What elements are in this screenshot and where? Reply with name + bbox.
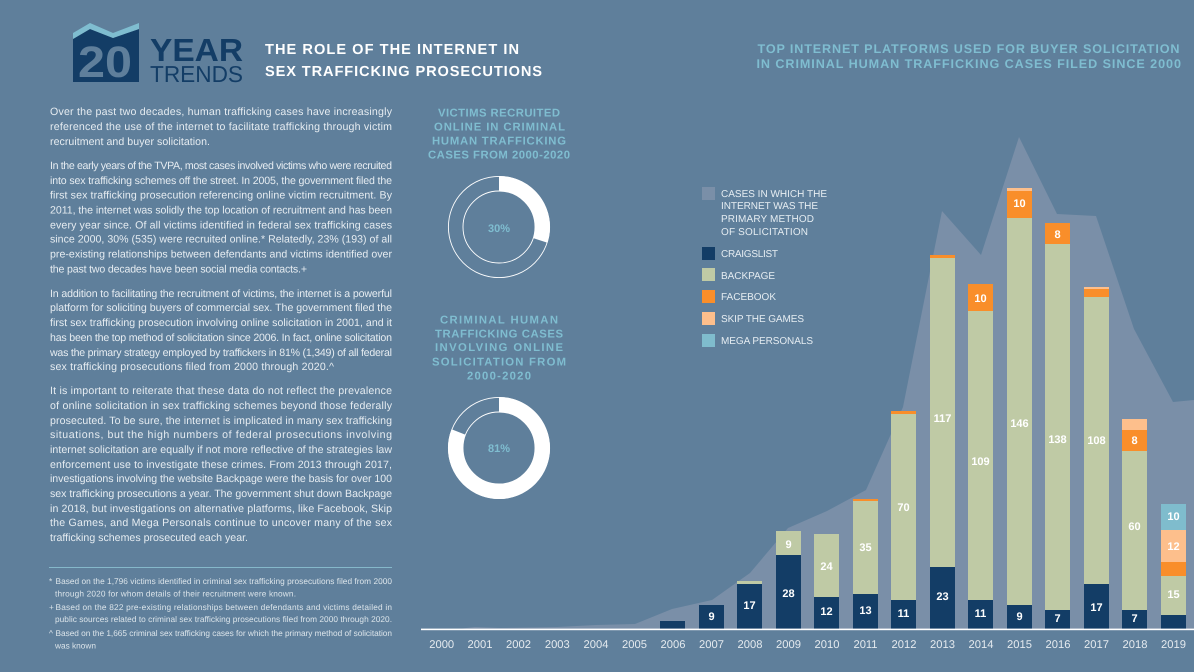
bar: 2009: 28 — [782, 588, 795, 600]
bar: 2009 — [776, 531, 801, 629]
chart axis: years: 2018 — [1123, 639, 1147, 651]
legend: PRIMARY METHOD — [721, 214, 814, 225]
heading: victims recruited online: CASES FROM 2000-2020 — [428, 150, 570, 162]
chart axis: years: 2016 — [1046, 639, 1070, 651]
heading: online solicitation: TRAFFICKING CASES — [435, 328, 563, 340]
bar: 2018: 60 — [1128, 521, 1141, 533]
bar: 2010: 12 — [820, 606, 833, 618]
chart: donut 30%: 30% — [488, 223, 510, 235]
text block: body copy: since 2000, 30% (535) were recruited online.* Relatedly, 23% (193) of all — [50, 234, 392, 246]
heading: chart title: TOP INTERNET PLATFORMS USED FOR BUYER SOLICITATION — [758, 42, 1180, 56]
bar: 2009: 9 — [785, 539, 792, 551]
bar chart: platforms by year — [660, 188, 1186, 629]
title: THE ROLE OF THE INTERNET IN — [265, 42, 519, 58]
title — [265, 42, 542, 80]
text block: footnotes: * — [49, 576, 53, 586]
text block: body copy: has been the top method of solicitation since 2006. In fact, online solicitation — [50, 332, 392, 344]
text block: body copy — [49, 106, 393, 544]
bar: 2015: 10 — [1013, 198, 1026, 210]
icon: 20 year trends logo: TRENDS — [150, 61, 243, 87]
text block: body copy: of online solicitation in sex trafficking schemes beyond those federally — [50, 400, 393, 412]
legend: OF SOLICITATION — [721, 227, 808, 238]
bar: 2019: 15 — [1167, 589, 1180, 601]
area chart: cases with internet as primary method — [441, 137, 1194, 629]
chart axis: years: 2001 — [468, 639, 492, 651]
bar: 2017: 108 — [1087, 435, 1106, 447]
chart axis: years — [429, 639, 1186, 651]
text block: body copy: the past two decades have been social media contacts.+ — [50, 263, 307, 275]
text block: body copy: recruitment and buyer solicitation. — [50, 136, 210, 148]
chart axis: years: 2004 — [584, 639, 608, 651]
bar: 2014: 109 — [971, 456, 990, 468]
title: SEX TRAFFICKING PROSECUTIONS — [265, 64, 542, 80]
text block: footnotes: Based on the 822 pre-existing relationships between defendants and victims detailed in — [56, 602, 392, 612]
bar: 2018: 7 — [1131, 613, 1138, 625]
legend: INTERNET WAS THE — [721, 201, 818, 212]
bar: 2017 — [1084, 287, 1109, 629]
bar: 2015: 146 — [1010, 418, 1029, 430]
text block: body copy: prosecuted. To be sure, the internet is implicated in many sex trafficking — [50, 415, 392, 427]
bar: 2007: 9 — [708, 611, 715, 623]
chart axis: years: 2010 — [815, 639, 839, 651]
bar: 2011 — [853, 499, 878, 629]
bar: 2016: 8 — [1054, 229, 1061, 241]
bar: 2010: 24 — [820, 561, 833, 573]
text block: footnotes: through 2020 for whom details of their recruitment were known. — [55, 588, 296, 598]
text block: body copy: In addition to facilitating the recruitment of victims, the internet is a powerful — [50, 288, 392, 300]
text block: footnotes: Based on the 1,665 criminal sex trafficking cases for which the primary method of solicitation — [56, 628, 392, 638]
legend: CRAIGSLIST — [721, 249, 778, 260]
text block: body copy: was the primary strategy employed by traffickers in 81% (1,349) of all federal — [49, 347, 392, 359]
chart axis: years: 2006 — [661, 639, 685, 651]
bar: 2007 — [699, 605, 724, 629]
heading: online solicitation — [432, 314, 566, 382]
text block: body copy: 2011, the internet was solidly the top location of recruitment and has been — [50, 204, 392, 216]
bar: 2016: 138 — [1048, 434, 1067, 446]
icon: 20 year trends logo: YEAR — [150, 32, 243, 68]
chart axis: years: 2009 — [776, 639, 801, 651]
bar: 2013: 117 — [934, 413, 951, 425]
heading: victims recruited online: HUMAN TRAFFICKING — [432, 136, 566, 148]
bar: 2018: 8 — [1131, 435, 1138, 447]
chart axis: years: 2019 — [1161, 639, 1186, 651]
bar: 2011: 35 — [859, 542, 872, 554]
bar: 2012: 70 — [897, 502, 910, 514]
heading: chart title — [756, 42, 1181, 71]
text block: body copy: every year since. Of all victims identified in federal sex trafficking cases — [50, 219, 392, 231]
chart axis: years: 2005 — [622, 639, 647, 651]
heading: online solicitation: SOLICITATION FROM — [432, 356, 566, 368]
chart: donut 81% — [448, 397, 550, 499]
legend: BACKPAGE — [721, 271, 775, 282]
bar: 2015: 9 — [1016, 611, 1023, 623]
legend — [702, 187, 827, 347]
icon: 20 year trends logo: 20 — [78, 38, 132, 87]
bar: 2019: 12 — [1167, 541, 1180, 553]
text block: body copy: enforcement use to investigate these crimes. From 2013 through 2017, — [50, 459, 392, 471]
text block: footnotes: ^ — [49, 628, 53, 638]
bar: 2016: 7 — [1054, 613, 1061, 625]
text block: body copy: platform for soliciting buyers of commercial sex. The government filed the — [50, 302, 392, 314]
legend: CASES IN WHICH THE — [721, 189, 827, 200]
text block: body copy: trafficking schemes prosecuted each year. — [50, 532, 248, 544]
text block: footnotes: Based on the 1,796 victims identified in criminal sex trafficking prosecutions filed from 2000 — [56, 576, 392, 586]
heading: online solicitation: INVOLVING ONLINE — [435, 342, 563, 354]
bar: 2014: 11 — [975, 608, 986, 620]
text block: body copy: It is important to reiterate that these data do not reflect the prevalence — [50, 385, 392, 397]
heading: victims recruited online: VICTIMS RECRUITED — [438, 108, 560, 120]
heading: victims recruited online — [428, 108, 570, 162]
text block: footnotes — [49, 576, 392, 650]
text block: body copy: situations, but the high numbers of federal prosecutions involving — [50, 429, 392, 441]
text block: body copy: first sex trafficking prosecution involving online solicitation in 2001, and it — [50, 317, 392, 329]
heading: chart title: IN CRIMINAL HUMAN TRAFFICKING CASES FILED SINCE 2000 — [756, 57, 1181, 71]
text block: footnotes: + — [49, 602, 54, 612]
heading: online solicitation: 2000-2020 — [467, 370, 531, 382]
legend: SKIP THE GAMES — [721, 314, 804, 325]
text block: body copy: first sex trafficking prosecution referencing online victim recruitment. By — [50, 189, 393, 201]
chart axis: years: 2017 — [1084, 639, 1109, 651]
chart axis: years: 2008 — [738, 639, 762, 651]
legend: FACEBOOK — [721, 292, 776, 303]
text block: body copy: investigations involving the website Backpage were the basis for over 100 — [50, 473, 392, 485]
bar: 2014: 10 — [974, 293, 987, 305]
bar: 2013: 23 — [936, 591, 949, 603]
bar: 2017: 17 — [1090, 602, 1103, 614]
chart axis: years: 2011 — [853, 639, 878, 651]
text block: footnotes: was known — [54, 640, 96, 650]
chart axis: years: 2012 — [892, 639, 916, 651]
bar: 2012: 11 — [898, 608, 909, 620]
bar: 2011: 13 — [859, 605, 872, 617]
text block: body copy: sex trafficking prosecutions a year. The government shut down Backpage — [50, 488, 392, 500]
text block: footnotes: public sources related to criminal sex trafficking prosecutions filed from 2000 through 2020. — [55, 614, 392, 624]
text block: body copy: sex trafficking prosecutions filed from 2000 through 2020.^ — [50, 361, 334, 373]
heading: victims recruited online: ONLINE IN CRIMINAL — [434, 122, 565, 134]
text block: body copy: into sex trafficking schemes off the street. In 2005, the government filed the — [50, 175, 392, 187]
chart axis: years: 2003 — [545, 639, 570, 651]
text block: body copy: referenced the use of the internet to facilitate trafficking through victim — [50, 121, 392, 133]
bar: 2018 — [1122, 419, 1147, 629]
chart axis: years: 2000 — [429, 639, 454, 651]
bar: 2010 — [814, 534, 839, 629]
chart: donut 30% — [448, 176, 550, 278]
text block: body copy: Over the past two decades, human trafficking cases have increasingly — [50, 106, 393, 118]
text block: body copy: In the early years of the TVPA, most cases involved victims who were recruited — [50, 160, 392, 172]
chart axis: years: 2015 — [1007, 639, 1032, 651]
bar: 2019: 10 — [1167, 511, 1180, 523]
heading: online solicitation: CRIMINAL HUMAN — [440, 314, 558, 326]
bar: 2015 — [1007, 188, 1032, 629]
chart axis: years: 2002 — [506, 639, 531, 651]
icon: 20 year trends logo — [73, 23, 243, 87]
chart: donut 81%: 81% — [488, 443, 510, 455]
bar: 2016 — [1045, 223, 1070, 629]
legend: MEGA PERSONALS — [721, 336, 813, 347]
text block: body copy: internet solicitation are equally if not more reflective of the strategies law — [50, 444, 392, 456]
chart axis: years: 2007 — [699, 639, 724, 651]
bar: 2013 — [930, 255, 955, 629]
chart axis: years: 2014 — [969, 639, 993, 651]
bar: 2014 — [968, 284, 993, 629]
bar: 2006 — [660, 621, 685, 629]
text block: body copy: pre-existing relationships between defendants and victims identified over — [50, 248, 392, 260]
text block: body copy: the Games, and Mega Personals continue to uncover many of the sex — [50, 517, 393, 529]
bar: 2008: 17 — [743, 600, 756, 612]
bar: 2019 — [1161, 504, 1186, 629]
bar: 2012 — [891, 411, 916, 629]
chart axis: years: 2013 — [930, 639, 955, 651]
text block: body copy: in 2018, but investigations on alternative platforms, like Facebook, Skip — [50, 503, 392, 515]
bar: 2008 — [737, 581, 762, 629]
